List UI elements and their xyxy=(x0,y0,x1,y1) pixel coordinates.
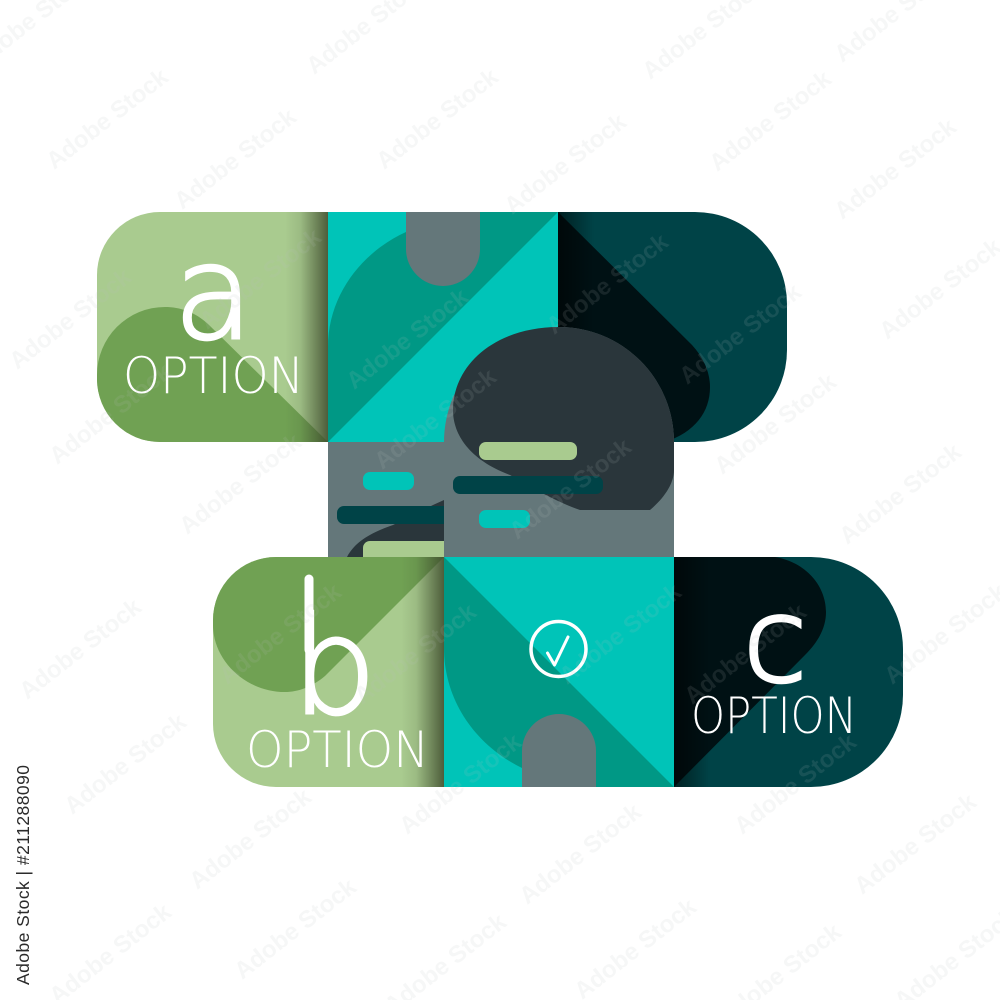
watermark pattern: Adobe Stock xyxy=(44,358,177,470)
top teal fold xyxy=(328,212,558,442)
panel: large grey text card xyxy=(444,327,674,557)
watermark pattern: Adobe Stock xyxy=(341,283,474,395)
option c dark fold xyxy=(674,557,826,787)
bottom teal fold xyxy=(444,557,674,787)
letter c: c xyxy=(743,574,807,709)
watermark pattern: Adobe Stock xyxy=(729,728,862,840)
watermark pattern: Adobe Stock xyxy=(849,788,982,900)
panel: option a xyxy=(97,212,328,442)
watermark pattern: Adobe Stock xyxy=(369,363,502,475)
watermark pattern: Adobe Stock xyxy=(554,578,687,690)
watermark pattern: Adobe Stock xyxy=(194,223,327,335)
large card green bar xyxy=(479,442,577,460)
watermark pattern: Adobe Stock xyxy=(541,228,674,340)
small card shadow blob xyxy=(347,500,444,557)
large card teal bar xyxy=(479,510,530,528)
panel: top dark option xyxy=(558,212,787,442)
watermark pattern: Adobe Stock xyxy=(4,263,137,375)
watermark pattern: Adobe Stock xyxy=(169,103,302,215)
large card shadow blob xyxy=(453,327,674,510)
small card teal bar xyxy=(363,472,414,490)
option c label: OPTION xyxy=(691,687,857,745)
panel: bottom teal square xyxy=(444,557,674,787)
watermark pattern: Adobe Stock xyxy=(229,873,362,985)
option b dark green fold xyxy=(213,557,444,692)
watermark pattern: Adobe Stock xyxy=(514,798,647,910)
panel: option b xyxy=(213,557,444,787)
watermark pattern: Adobe Stock xyxy=(704,65,837,177)
watermark pattern: Adobe Stock xyxy=(59,708,192,820)
watermark pattern: Adobe Stock xyxy=(14,593,147,705)
option b label: OPTION xyxy=(246,721,429,779)
bottom grey tab xyxy=(522,714,596,787)
stock id caption: Adobe Stock | #211288090 xyxy=(13,765,33,985)
watermark pattern: Adobe Stock xyxy=(394,728,527,840)
watermark pattern: Adobe Stock xyxy=(41,63,174,175)
letter a: a xyxy=(174,217,253,369)
watermark pattern: Adobe Stock xyxy=(184,783,317,895)
icon: check mark xyxy=(531,622,586,676)
watermark pattern: Adobe Stock xyxy=(371,63,504,175)
watermark pattern: Adobe Stock xyxy=(174,428,307,540)
watermark pattern: Adobe Stock xyxy=(674,278,807,390)
watermark pattern: Adobe Stock xyxy=(829,113,962,225)
option a edge shadow xyxy=(285,212,328,442)
watermark pattern: Adobe Stock xyxy=(349,598,482,710)
watermark pattern: Adobe Stock xyxy=(709,368,842,480)
option b edge shadow xyxy=(401,557,444,787)
letter b: b xyxy=(291,589,377,745)
watermark pattern: Adobe Stock xyxy=(834,438,967,550)
top dark shadow xyxy=(558,212,586,327)
watermark pattern: Adobe Stock xyxy=(504,433,637,545)
option a label: OPTION xyxy=(123,347,304,405)
panel: small grey text card xyxy=(328,442,444,557)
option a dark green fold xyxy=(97,307,328,442)
panel: option c xyxy=(674,557,903,787)
small card dark bar xyxy=(337,506,444,524)
top dark fold xyxy=(558,212,710,442)
watermark pattern: Adobe Stock xyxy=(499,108,632,220)
watermark pattern: Adobe Stock xyxy=(214,578,347,690)
panel: top teal square xyxy=(328,212,558,442)
option c shadow xyxy=(674,557,702,787)
watermark pattern: Adobe Stock xyxy=(679,598,812,710)
top grey tab xyxy=(406,212,480,286)
small card green bar xyxy=(363,541,444,557)
large card dark bar xyxy=(453,476,603,494)
